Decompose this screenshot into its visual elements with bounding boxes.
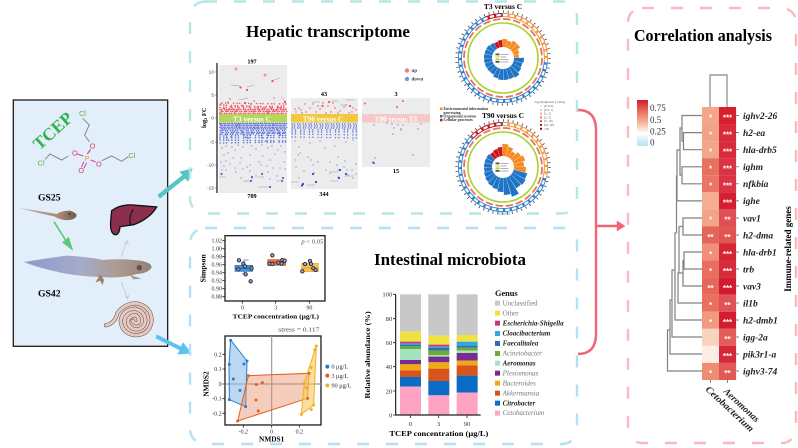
- GS42 label: GS42: [38, 289, 61, 300]
- significance stars: *: [709, 216, 713, 224]
- genus legend: Genus: [495, 289, 518, 298]
- molecule structure: P: [85, 154, 90, 163]
- stacked bar chart: 0: [389, 412, 393, 419]
- molecule structure: [38, 109, 136, 175]
- box plot: Simpson: 1.00: [212, 247, 222, 253]
- GS25 label: GS25: [38, 193, 61, 204]
- significance stars: **: [707, 233, 714, 242]
- gene labels: [710, 112, 778, 383]
- molecule structure: Cl: [38, 158, 45, 167]
- gene labels: vav3: [743, 282, 761, 292]
- genus legend: Escherichia-Shigella: [502, 320, 564, 328]
- box plot: Simpson: TCEP concentration (µg/L): [233, 314, 319, 321]
- gene labels: igg-2a: [743, 333, 768, 343]
- y axis: 5: [211, 92, 214, 98]
- genus legend: Aeromonas: [502, 359, 536, 367]
- volcano plot: T90 versus C: [303, 114, 343, 124]
- y axis: 2: [203, 118, 208, 120]
- significance stars: **: [707, 284, 714, 293]
- significance stars: *: [709, 318, 713, 327]
- inner key: T3: [496, 54, 508, 63]
- gene labels: h2-dma: [743, 231, 773, 241]
- volcano plot: T90 versus T3: [375, 114, 417, 124]
- axes: [395, 294, 481, 416]
- gene labels: ighv3-74: [743, 367, 778, 377]
- significance stars: ***: [723, 318, 733, 327]
- gene labels: il1b: [743, 299, 758, 309]
- arrow: growth: [54, 222, 72, 249]
- panel: experimental design: [13, 100, 168, 346]
- icon: intestine: [106, 303, 152, 335]
- genus legend: Faecalitalea: [503, 340, 539, 348]
- icon: liver: [111, 205, 157, 235]
- molecule structure: O: [90, 142, 96, 151]
- NMDS plot: 0.2: [214, 352, 222, 358]
- colour scale: 0.5: [650, 115, 662, 125]
- significance legend: (5, 10]: [544, 119, 552, 124]
- gene labels: hla-drb5: [743, 146, 777, 156]
- column dendrogram: [710, 75, 727, 107]
- NMDS legend: 0 μg/L: [331, 364, 348, 371]
- stacked bar chart: 60: [386, 340, 393, 347]
- box plot: Simpson: 0.94: [212, 271, 222, 277]
- heatmap: [702, 107, 736, 380]
- NMDS plot: [202, 327, 352, 444]
- y axis: -10: [207, 162, 214, 168]
- significance stars: *: [709, 267, 713, 276]
- y axis: log: [201, 120, 208, 128]
- stacked bar chart: 90: [464, 421, 471, 428]
- column labels: Cetobacterium: [703, 385, 755, 434]
- box plot: Simpson: Simpson: [199, 254, 208, 282]
- y axis: 0: [211, 116, 214, 122]
- NMDS plot: stress = 0.117: [278, 327, 320, 334]
- significance stars: *: [709, 369, 713, 378]
- genus legend: Citrobacter: [503, 399, 536, 407]
- stacked bar chart: 80: [386, 316, 393, 323]
- box plot: Simpson: 90: [306, 306, 312, 312]
- significance legend: (1, 2]: [544, 112, 551, 117]
- significance stars: ***: [723, 198, 733, 208]
- stacked bar chart: TCEP concentration (µg/L): [389, 429, 489, 438]
- icon: large tadpole: [24, 256, 152, 285]
- gene labels: nfkbia: [743, 180, 769, 190]
- counts: 197: [247, 58, 257, 66]
- inner key: T90: [496, 162, 508, 172]
- counts: 15: [393, 168, 399, 175]
- NMDS plot: 0: [219, 382, 222, 388]
- stacked bar chart: 20: [386, 388, 393, 395]
- genus legend: Acinetobacter: [502, 349, 542, 357]
- box plot: Simpson: 1.02: [212, 239, 222, 245]
- colour scale: 0.25: [650, 126, 666, 136]
- genus legend: Unclassified: [503, 299, 538, 307]
- significance stars: ***: [723, 148, 733, 156]
- gene labels: hla-drb1: [743, 248, 777, 258]
- counts: 344: [319, 191, 329, 198]
- colour scale: 0: [650, 138, 655, 148]
- arrow: to intestinal panel: [156, 335, 191, 354]
- NMDS plot: -0.2: [212, 411, 222, 417]
- genus legend: [495, 289, 564, 417]
- NMDS legend: [325, 364, 352, 390]
- column labels: Aeromonas: [720, 386, 761, 425]
- significance stars: ***: [723, 164, 733, 174]
- pathway legend: Environmental information: [444, 107, 489, 111]
- volcano legend: down: [412, 78, 423, 82]
- NMDS plot: NMDS2: [202, 371, 211, 397]
- box plot: Simpson: 0.90: [212, 287, 222, 293]
- box plot: Simpson: 0.92: [212, 279, 222, 285]
- y axis: FC: [201, 107, 208, 118]
- significance stars: [707, 114, 733, 378]
- molecule structure: O: [72, 148, 78, 157]
- pathway legend: Organismal systems: [444, 114, 477, 118]
- circular chart: T3 versus C: [456, 12, 550, 104]
- NMDS plot: -0.1: [212, 397, 222, 403]
- significance stars: **: [724, 233, 731, 242]
- significance stars: *: [709, 114, 713, 122]
- genus legend: Akkermansia: [502, 389, 540, 397]
- significance stars: ***: [723, 114, 733, 122]
- bar: 90: [457, 294, 478, 415]
- circular chart: T90 versus C: [456, 120, 550, 214]
- arrow: bracket to correlation: [578, 110, 625, 354]
- molecule structure: O: [78, 166, 84, 175]
- icon: small tadpole: [19, 208, 77, 220]
- gene labels: vav1: [743, 214, 761, 224]
- genus legend: Plesiomonas: [502, 369, 539, 377]
- scatter: panel 1 up: [220, 69, 287, 114]
- NMDS plot: 0.1: [214, 367, 222, 373]
- box plot: Simpson: 3: [274, 306, 277, 312]
- gene labels: ighv2-26: [743, 112, 778, 122]
- y axis: [201, 63, 217, 193]
- pathway legend: Cellular processes: [444, 118, 473, 122]
- significance stars: ***: [723, 130, 733, 140]
- heading: Intestinal microbiota: [374, 250, 526, 269]
- molecule structure: Cl: [128, 151, 136, 160]
- gene labels: pik3r1-a: [742, 350, 776, 360]
- arrow: to liver: [121, 241, 128, 257]
- box plot: Simpson: p < 0.05: [300, 239, 324, 246]
- NMDS legend: 90 μg/L: [331, 383, 352, 390]
- panel: intestinal microbiota: [190, 228, 577, 444]
- stacked bar chart: [363, 289, 564, 438]
- genus legend: Bacteroides: [503, 379, 536, 387]
- bar: 0: [400, 294, 421, 415]
- panel: correlation analysis: [628, 8, 796, 443]
- significance stars: *: [709, 182, 713, 190]
- significance legend: -log10(adjusted p value): [534, 100, 565, 104]
- pathway legend: processing: [444, 111, 461, 115]
- colour scale: 0.75: [650, 103, 666, 113]
- genus legend: Cloacibacterium: [503, 330, 551, 338]
- row axis title: Immune-related genes: [783, 206, 793, 292]
- TCEP label: TCEP: [29, 108, 77, 154]
- counts: [247, 58, 399, 200]
- volcano plot: [201, 58, 430, 200]
- significance stars: **: [724, 335, 731, 344]
- significance legend: [534, 100, 565, 131]
- significance stars: ***: [723, 284, 733, 293]
- genus legend: Other: [503, 309, 519, 317]
- y axis: 10: [209, 70, 214, 76]
- y axis: -5: [210, 140, 214, 146]
- significance legend: >20: [544, 127, 549, 131]
- NMDS plot: 0: [270, 430, 273, 436]
- volcano legend: [405, 68, 423, 82]
- circular chart title: T3: T3 versus C: [484, 2, 522, 11]
- gene labels: trb: [743, 265, 754, 275]
- volcano plot: T3 versus C: [233, 114, 271, 124]
- heading: Correlation analysis: [634, 26, 772, 45]
- stacked bar chart: Relative abundance (%): [363, 311, 372, 399]
- counts: 43: [321, 91, 327, 98]
- significance stars: **: [724, 369, 731, 378]
- box plot: Simpson: 0.98: [212, 255, 222, 261]
- arrow: to intestine: [121, 282, 129, 299]
- stacked bar chart: 100: [382, 292, 393, 299]
- significance stars: **: [724, 216, 731, 224]
- box plot: Simpson: 0: [241, 306, 244, 312]
- y axis: -15: [207, 186, 214, 192]
- molecule structure: O: [96, 159, 102, 168]
- arrow: to hepatic panel: [158, 169, 192, 198]
- scatter: panel 1 down: [219, 124, 287, 187]
- stacked bar chart: 40: [386, 364, 393, 371]
- scatter: panel 3: [365, 101, 421, 163]
- counts: 709: [247, 193, 257, 200]
- NMDS plot: -0.2: [239, 430, 248, 436]
- gene labels: ighm: [743, 163, 763, 173]
- significance stars: *: [709, 130, 713, 140]
- panel: hepatic transcriptome: [190, 2, 577, 214]
- significance legend: (0, 0.5]: [544, 104, 553, 109]
- significance legend: (10, 20]: [544, 123, 554, 128]
- box plot: Simpson: 0.88: [212, 295, 222, 301]
- significance stars: ***: [723, 267, 733, 276]
- bar: 3: [428, 294, 449, 415]
- stacked bar chart: 3: [437, 421, 441, 428]
- significance legend: (0.5, 1]: [544, 108, 553, 113]
- significance stars: *: [709, 301, 713, 310]
- significance legend: (2, 5]: [544, 115, 551, 120]
- comparison bands: [219, 114, 287, 122]
- gene labels: h2-ea: [743, 129, 765, 139]
- significance stars: ***: [723, 250, 733, 259]
- significance stars: ***: [723, 182, 733, 190]
- pathway legend: [440, 107, 489, 122]
- box plot: Simpson: 0.96: [212, 263, 222, 269]
- scatter: panel 2: [295, 100, 356, 113]
- heading: Hepatic transcriptome: [246, 22, 410, 41]
- significance stars: *: [709, 250, 713, 259]
- NMDS plot: 0.2: [296, 430, 303, 436]
- NMDS plot: NMDS1: [259, 435, 285, 444]
- molecule structure: Cl: [79, 109, 86, 118]
- stacked bar chart: 0: [409, 421, 413, 428]
- NMDS legend: 3 μg/L: [331, 373, 348, 380]
- box plot: Simpson: [199, 236, 325, 321]
- colour scale: [637, 100, 666, 148]
- volcano legend: up: [412, 69, 417, 74]
- counts: 3: [394, 91, 398, 98]
- significance stars: **: [724, 301, 731, 310]
- gene labels: ighe: [743, 197, 761, 207]
- gene labels: h2-dmb1: [743, 316, 778, 326]
- significance stars: *: [709, 164, 713, 174]
- row dendrogram: [668, 116, 702, 371]
- genus legend: Cetobacterium: [503, 409, 544, 417]
- circular chart title: T90: T90 versus C: [482, 111, 524, 120]
- significance stars: ***: [723, 352, 733, 361]
- significance stars: *: [709, 148, 713, 156]
